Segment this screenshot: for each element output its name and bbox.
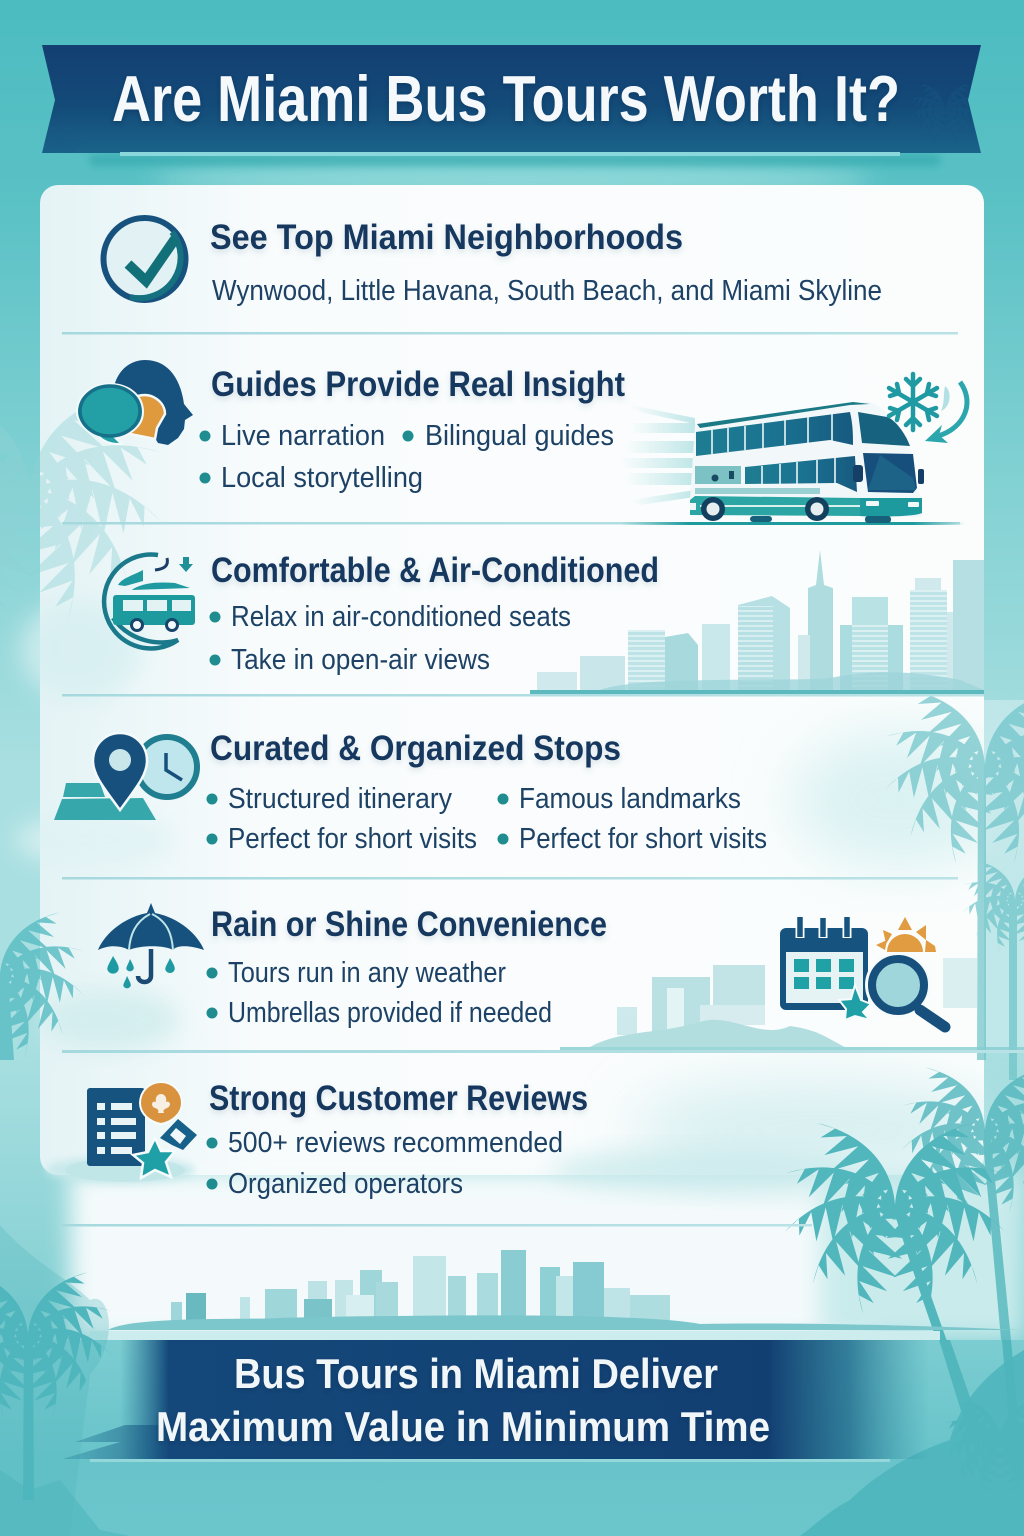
palm: pale left upper	[0, 371, 167, 627]
icon: calendar, magnifier and sun	[780, 917, 945, 1027]
bullet list: Tours run in any weather	[228, 957, 506, 989]
icon: cooling arrow	[925, 382, 967, 443]
icon: check mark badge	[104, 218, 186, 300]
palm: bottom right foliage	[800, 1350, 1024, 1536]
bullet list: Bilingual guides	[425, 420, 614, 452]
row: See Top Miami Neighborhoods	[104, 218, 882, 307]
icon: umbrella and rain	[98, 903, 204, 988]
bullet list	[206, 957, 552, 1029]
footer banner	[62, 1340, 930, 1462]
icon: review sheet, badge and star	[65, 1082, 197, 1182]
wheels	[701, 497, 891, 523]
side panel	[695, 466, 741, 484]
palm trunks over water	[939, 1340, 1024, 1480]
heading: Comfortable & Air-Conditioned	[211, 551, 659, 590]
background glow above the panel	[152, 160, 872, 200]
banner underglow	[90, 154, 940, 166]
panel: lower misty extension	[15, 600, 1024, 1342]
bullet list: 500+ reviews recommended	[228, 1127, 563, 1159]
skyline: row five	[560, 958, 1024, 1053]
bullet list: Take in open-air views	[231, 644, 490, 676]
bullet list	[200, 420, 614, 494]
row: Guides Provide Real Insight	[78, 360, 967, 525]
bus body	[690, 402, 922, 517]
description: Wynwood, Little Havana, South Beach, and Miami Skyline	[212, 275, 882, 307]
palm: right lower big	[780, 1054, 1024, 1420]
row separators	[62, 332, 1024, 1226]
speed lines	[620, 405, 695, 505]
heading: Guides Provide Real Insight	[211, 365, 625, 404]
banner ribbon	[42, 45, 981, 153]
bullet list	[206, 783, 767, 855]
bullet list: Umbrellas provided if needed	[228, 997, 552, 1029]
closing message: Maximum Value in Minimum Time	[156, 1403, 770, 1450]
bullet list	[206, 1127, 563, 1200]
bullet list	[210, 601, 571, 676]
bottom teal water and ground	[0, 1340, 1024, 1536]
closing message	[156, 1350, 770, 1450]
icon: snowflake	[889, 374, 937, 430]
heading: Curated & Organized Stops	[210, 729, 621, 768]
row: Comfortable & Air-Conditioned	[104, 551, 659, 676]
row: Strong Customer Reviews	[65, 1079, 588, 1200]
mirrors	[853, 465, 863, 482]
icon: double-decker bus	[620, 402, 965, 525]
icon: air-conditioned bus	[104, 554, 195, 648]
row: Rain or Shine Convenience	[98, 903, 945, 1029]
upper windows	[696, 412, 853, 456]
bullet list: Perfect for short visits	[228, 823, 477, 855]
row: Curated & Organized Stops	[54, 729, 767, 855]
bullet list: Famous landmarks	[519, 783, 741, 815]
bullet list: Structured itinerary	[228, 783, 453, 815]
stripes	[695, 488, 820, 494]
banner underline	[90, 1459, 890, 1462]
panel: main white card	[40, 185, 984, 1175]
palm: left middle	[0, 899, 88, 1063]
icon: map pin, clock and map	[54, 733, 197, 820]
icon: speaking head with speech bubbles	[78, 360, 193, 445]
skyline: bottom city	[90, 1250, 1020, 1340]
windshield	[863, 453, 917, 493]
bullet list: Perfect for short visits	[519, 823, 767, 855]
bullet list: Live narration	[221, 420, 385, 452]
front upper window	[858, 412, 910, 446]
banner tails	[62, 1425, 170, 1459]
title banner	[34, 45, 984, 166]
heading: See Top Miami Neighborhoods	[210, 218, 683, 257]
palm: left bottom and foliage	[0, 1225, 130, 1536]
lower windows	[745, 456, 857, 492]
bullet list: Local storytelling	[221, 462, 423, 494]
banner ribbon	[120, 1340, 930, 1459]
palm: right upper	[881, 675, 1024, 1080]
road	[620, 522, 965, 525]
heading: Strong Customer Reviews	[209, 1079, 588, 1118]
banner highlight line	[120, 152, 900, 156]
bullet list: Organized operators	[228, 1168, 463, 1200]
skyline: row three	[530, 550, 984, 694]
heading: Rain or Shine Convenience	[211, 905, 607, 944]
banner palms	[45, 115, 972, 140]
closing message: Bus Tours in Miami Deliver	[234, 1350, 718, 1397]
bullet list: Relax in air-conditioned seats	[231, 601, 571, 633]
